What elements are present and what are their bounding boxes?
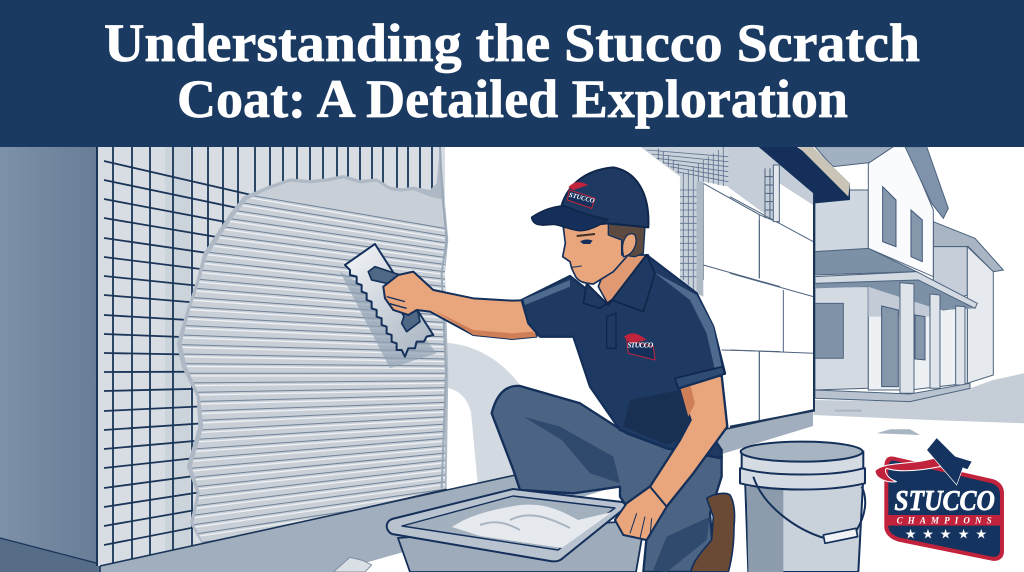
- hair: [608, 224, 645, 257]
- worker: [492, 167, 734, 572]
- lower arm: [615, 375, 727, 540]
- logo stars: ★★★★★: [905, 528, 987, 543]
- Stucco Champions logo: [875, 438, 1004, 561]
- eye: [580, 240, 593, 244]
- upper mesh strip: [640, 147, 728, 297]
- hand gripping tub: [615, 487, 667, 540]
- header banner: [0, 0, 1024, 147]
- cap logo: STUCCO: [568, 192, 595, 205]
- mouth: [572, 266, 582, 267]
- trousers: [492, 386, 722, 572]
- scratch coat plaster patch: [177, 147, 448, 549]
- illustration scene: [0, 147, 1024, 572]
- raised arm and hand: [383, 272, 537, 339]
- wall shadow behind worker: [447, 343, 520, 482]
- roof overhang: [730, 147, 850, 427]
- foam board wall: [703, 147, 813, 420]
- boot: [691, 493, 734, 572]
- logo subtitle: CHAMPIONS: [897, 515, 992, 525]
- cap brim: [532, 206, 608, 231]
- title: [104, 13, 920, 129]
- logo name: STUCCO: [894, 486, 995, 517]
- neck: [598, 254, 650, 302]
- eyebrow: [577, 234, 595, 236]
- placket: [607, 313, 616, 348]
- base ledge: [100, 410, 813, 572]
- trowel: [340, 244, 437, 368]
- logo trowel: [927, 438, 964, 485]
- background house: [813, 147, 1024, 435]
- ear: [623, 234, 636, 257]
- mortar rubble: [332, 556, 372, 572]
- mortar tub: [387, 489, 645, 572]
- bucket handle grip: [823, 528, 858, 543]
- shirt logo: STUCCO: [627, 340, 654, 349]
- left wall corner: [0, 147, 100, 572]
- cap: [560, 167, 648, 227]
- title: Understanding the Stucco Scratch: [104, 13, 920, 73]
- face: [563, 223, 627, 284]
- bucket: [740, 442, 865, 572]
- sleeve cuff: [675, 367, 725, 388]
- cap logo: [567, 182, 595, 208]
- logo shield: [884, 456, 1004, 561]
- trouser folds: [523, 417, 710, 572]
- polo shirt: [522, 255, 725, 458]
- logo swoosh: [875, 455, 947, 482]
- title: Coat: A Detailed Exploration: [177, 69, 848, 129]
- collar: [583, 255, 655, 312]
- logo band: [887, 515, 1001, 526]
- mortar: [452, 505, 612, 548]
- reinforcing mesh: [97, 147, 445, 566]
- shirt logo: [624, 333, 655, 360]
